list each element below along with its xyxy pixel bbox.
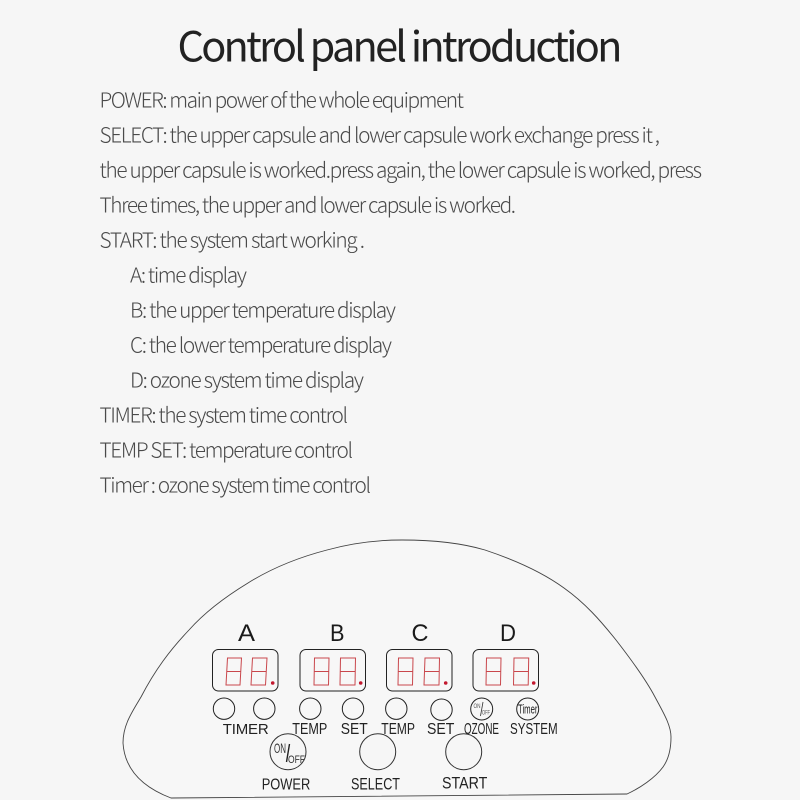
panel: control panel diagram — [123, 540, 671, 798]
display A: A — [238, 620, 255, 647]
button labels: small row — [223, 721, 558, 738]
button: system timer: Timer — [518, 702, 538, 716]
display A — [212, 620, 278, 691]
text block: control descriptions: A: time display — [130, 258, 247, 288]
text block: control descriptions: SELECT: the upper capsule and lower capsule work exchange press it , — [100, 118, 660, 148]
button labels: main row: POWER — [262, 776, 310, 793]
button: ozone on/off: ON — [474, 704, 480, 710]
button: system timer — [517, 698, 539, 720]
button labels: main row — [262, 774, 487, 793]
text block: control descriptions: TIMER: the system time control — [100, 398, 348, 428]
display C — [386, 620, 452, 691]
text block: control descriptions: START: the system start working . — [100, 223, 365, 253]
display B: B — [330, 620, 344, 647]
button: start — [446, 734, 482, 770]
button labels: small row: SET — [341, 721, 368, 738]
button: select — [360, 734, 396, 770]
text block: control descriptions: TEMP SET: temperature control — [100, 433, 353, 463]
panel outline — [123, 540, 671, 798]
buttons: small row — [213, 698, 452, 720]
text block: control descriptions: C: the lower temperature display — [130, 328, 392, 358]
button labels: small row: TEMP — [292, 721, 327, 738]
button: ozone on/off — [471, 698, 493, 720]
button labels: small row: OZONE — [464, 721, 499, 738]
button labels: small row: TIMER — [223, 721, 269, 738]
text block: control descriptions: Timer : ozone system time control — [100, 468, 371, 498]
text block: control descriptions: D: ozone system time display — [130, 363, 364, 393]
text block: control descriptions: Three times, the upper and lower capsule is worked. — [100, 188, 516, 218]
display C: C — [412, 620, 428, 647]
text block: control descriptions: POWER: main power of the whole equipment — [100, 83, 465, 113]
button: power on/off: ON — [274, 740, 286, 756]
button: power on/off: OFF — [288, 754, 305, 766]
button labels: small row: SET — [427, 721, 455, 738]
text block: control descriptions: B: the upper temperature display — [130, 293, 396, 323]
button: power on/off — [270, 734, 306, 770]
button labels: main row: START — [442, 774, 487, 792]
button labels: small row: TEMP — [381, 721, 415, 738]
text block: control descriptions — [100, 83, 702, 498]
button: ozone on/off: OFF — [482, 710, 490, 716]
display D — [473, 620, 538, 691]
button labels: small row: SYSTEM — [510, 721, 558, 738]
display B — [300, 620, 366, 691]
text block: control descriptions: the upper capsule is worked.press again, the lower capsule is worked, press — [100, 153, 702, 183]
display D: D — [500, 620, 516, 647]
title: Control panel introduction — [178, 14, 622, 74]
button labels: main row: SELECT — [351, 774, 400, 793]
